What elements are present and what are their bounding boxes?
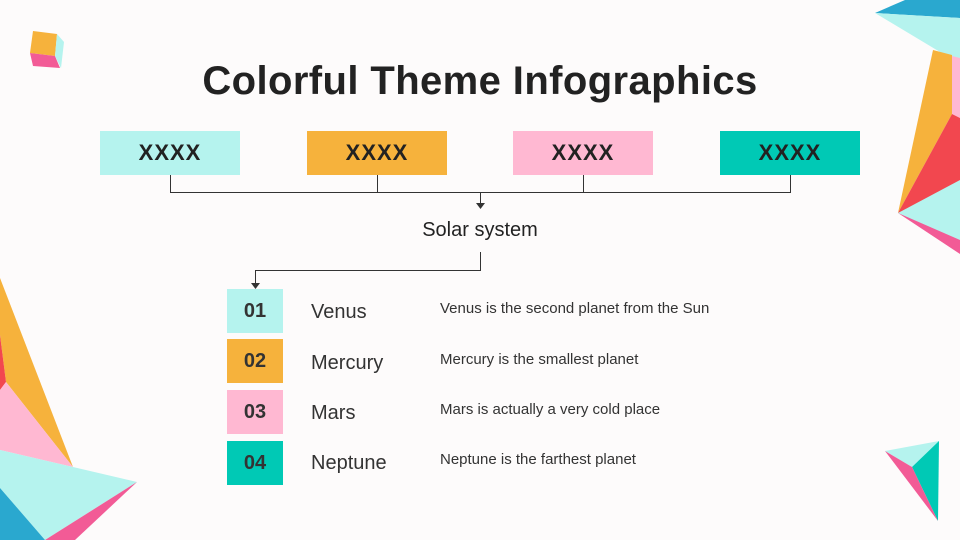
row 4: 04 [244, 452, 266, 474]
subheading: Solar system [422, 219, 538, 241]
connectors [170, 175, 790, 285]
box 1 [100, 131, 240, 175]
row 2 [227, 339, 638, 383]
row 2: 02 [244, 350, 266, 372]
box 2 [307, 131, 447, 175]
row 4: Neptune [311, 452, 387, 474]
box 2: XXXX [346, 140, 408, 165]
row 3: 03 [244, 400, 266, 422]
row 1 [227, 289, 709, 333]
row 2: Mercury is the smallest planet [440, 351, 638, 368]
row 3 [227, 390, 660, 434]
box 1: XXXX [139, 140, 201, 165]
row 2: Mercury [311, 352, 383, 374]
box 3 [513, 131, 653, 175]
row 1: 01 [244, 300, 266, 322]
row 4: Neptune is the farthest planet [440, 451, 636, 468]
title: Colorful Theme Infographics [202, 59, 758, 103]
icon: cube top-left [30, 31, 64, 68]
arrowheads [251, 203, 485, 289]
decoration: top-right triangles [875, 0, 960, 254]
box 3: XXXX [552, 140, 614, 165]
row 3: Mars [311, 402, 355, 424]
row 1: Venus is the second planet from the Sun [440, 300, 709, 317]
row 4 [227, 441, 636, 485]
row 3: Mars is actually a very cold place [440, 401, 660, 418]
decoration: bottom-left triangles [0, 278, 137, 540]
row 1: Venus [311, 301, 367, 323]
box 4 [720, 131, 860, 175]
box 4: XXXX [759, 140, 821, 165]
decoration: bottom-right triangle [885, 441, 939, 521]
